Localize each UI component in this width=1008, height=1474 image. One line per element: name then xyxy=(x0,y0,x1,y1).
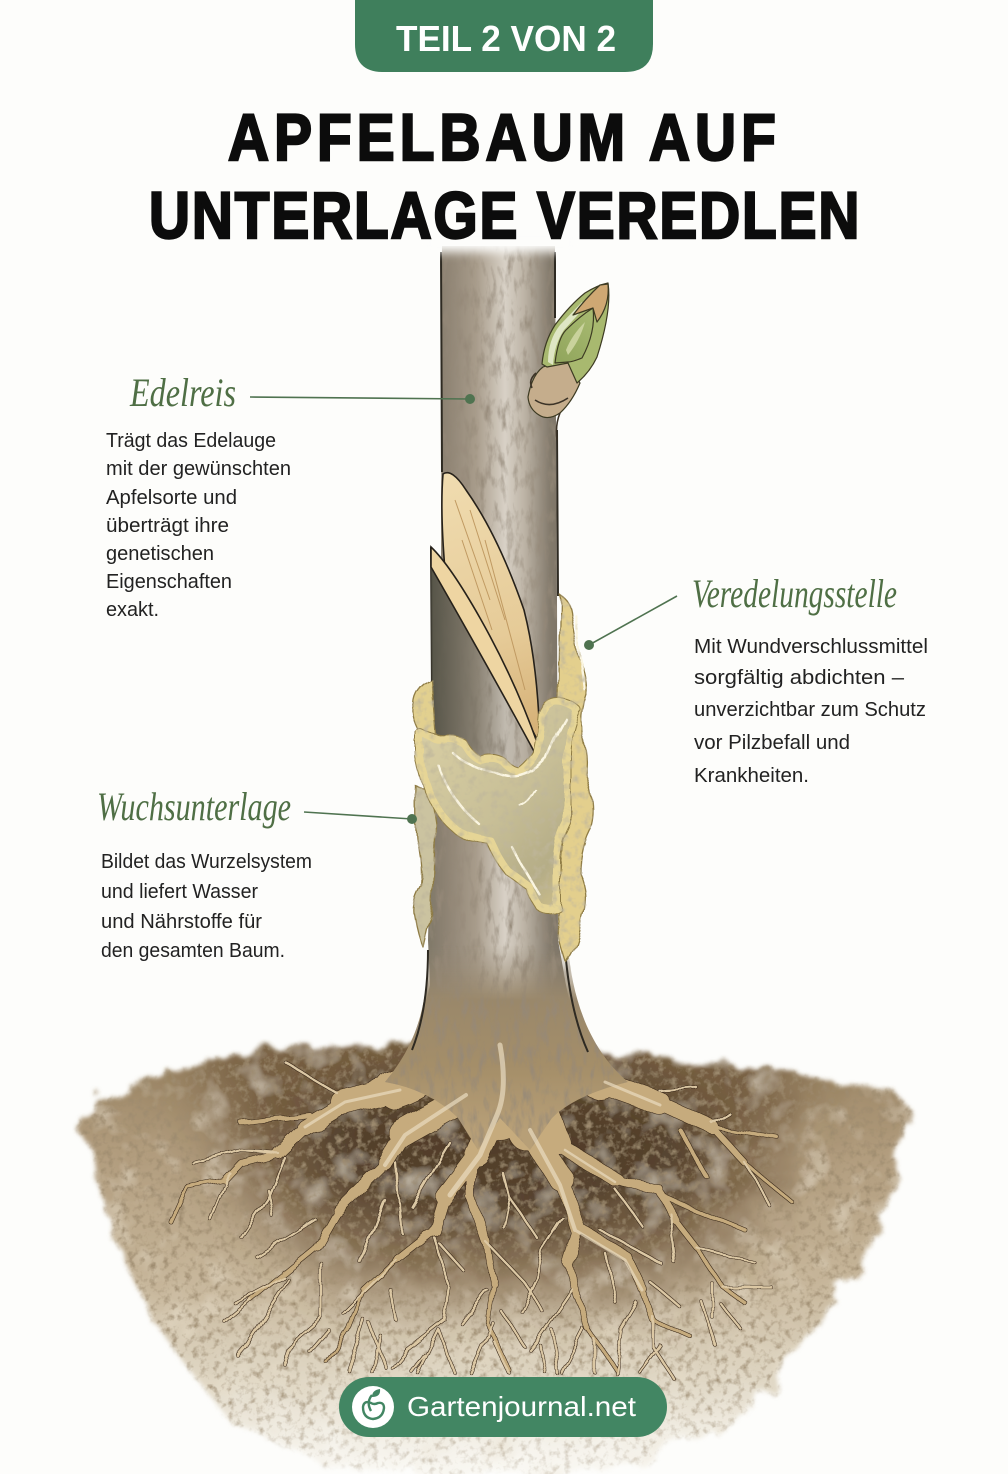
soil mass xyxy=(85,1020,912,1474)
root flare highlights xyxy=(305,1045,660,1290)
callout: Veredelungsstelle: unverzichtbar zum Schutz xyxy=(694,699,926,721)
right drip xyxy=(557,595,594,963)
callout: Edelreis: exakt. xyxy=(106,599,159,621)
central band xyxy=(420,702,577,910)
callout: Edelreis: mit der gewünschten xyxy=(106,458,291,480)
left upper blob xyxy=(413,680,436,735)
callout: Veredelungsstelle: Krankheiten. xyxy=(694,765,809,787)
root system xyxy=(171,1040,793,1380)
callout: Wuchsunterlage: den gesamten Baum. xyxy=(101,940,285,962)
rootstock sliver xyxy=(431,547,538,755)
callout: Veredelungsstelle: Veredelungsstelle xyxy=(692,571,897,616)
bud scales xyxy=(542,283,609,383)
callout: Veredelungsstelle xyxy=(584,571,928,787)
icon: sprout in circle xyxy=(352,1386,394,1428)
callout: Veredelungsstelle: Mit Wundverschlussmittel xyxy=(694,636,928,658)
scion cut xyxy=(442,473,540,745)
soil with roots illustration xyxy=(85,1020,912,1474)
grafting cut wedges xyxy=(431,473,540,755)
title: APFELBAUM AUF xyxy=(228,101,776,175)
left drip xyxy=(414,787,435,947)
bud base xyxy=(528,363,580,418)
tree trunk xyxy=(305,232,660,1290)
grafting wax sealant xyxy=(413,595,594,963)
callout: Veredelungsstelle: vor Pilzbefall und xyxy=(694,732,850,754)
callout: Wuchsunterlage: und Nährstoffe für xyxy=(101,911,262,933)
callout: Wuchsunterlage: Wuchsunterlage xyxy=(97,784,291,829)
callout: Edelreis: Eigenschaften xyxy=(106,571,232,593)
callout: Edelreis: Trägt das Edelauge xyxy=(106,430,276,452)
callout: Edelreis: Apfelsorte und xyxy=(106,487,237,509)
bark xyxy=(410,246,590,1070)
top fade xyxy=(425,232,575,252)
central band rim xyxy=(420,702,577,910)
footer logo pill: Gartenjournal.net xyxy=(407,1391,636,1422)
callout: Veredelungsstelle: sorgfältig abdichten – xyxy=(694,667,905,689)
wax highlights xyxy=(438,615,585,895)
header tab: TEIL 2 VON 2 xyxy=(396,18,616,59)
callout: Wuchsunterlage: Bildet das Wurzelsystem xyxy=(101,851,312,873)
bud xyxy=(528,283,609,440)
callout: Wuchsunterlage xyxy=(97,784,417,962)
callout: Edelreis: Edelreis xyxy=(129,370,236,415)
title: UNTERLAGE VEREDLEN xyxy=(149,179,859,253)
footer logo pill xyxy=(339,1377,667,1437)
lower dark wedge xyxy=(431,547,536,772)
callout: Wuchsunterlage: und liefert Wasser xyxy=(101,881,258,903)
title xyxy=(149,101,859,253)
trunk flare xyxy=(385,945,628,1150)
callout: Edelreis: genetischen xyxy=(106,543,214,565)
callout: Edelreis: überträgt ihre xyxy=(106,515,229,537)
callout: Edelreis xyxy=(106,370,475,621)
header tab xyxy=(355,0,653,72)
trunk outline xyxy=(412,252,588,1052)
